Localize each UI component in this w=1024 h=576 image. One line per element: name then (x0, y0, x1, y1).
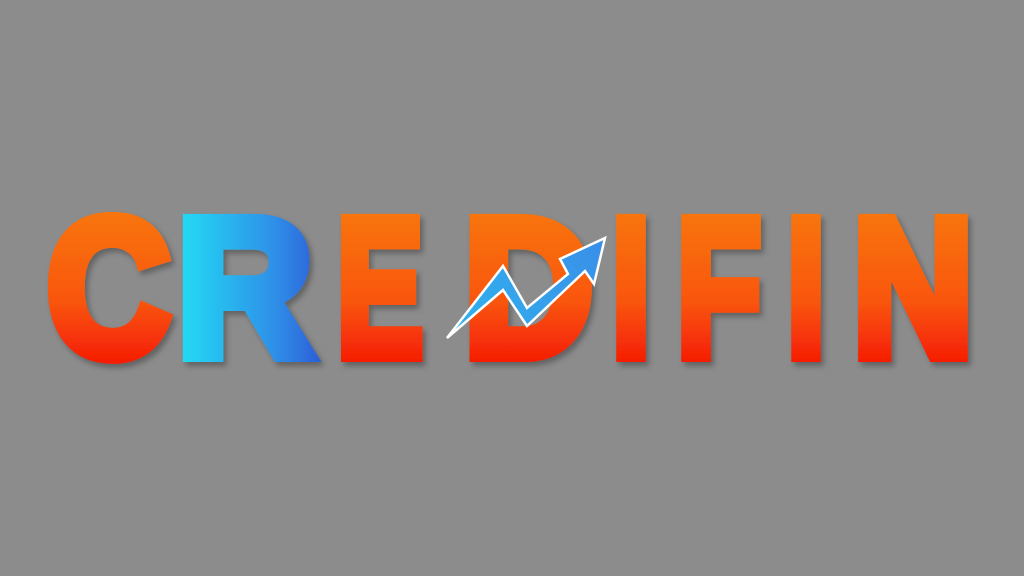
wordmark letters: F (677, 179, 761, 397)
wordmark letters: I (787, 179, 825, 397)
wordmark letters: D (464, 179, 593, 397)
wordmark letters: N (853, 179, 973, 397)
wordmark letters (47, 179, 973, 397)
icon: growth arrow (447, 238, 605, 338)
wordmark letters: R (177, 179, 313, 397)
wordmark letters: E (337, 179, 423, 397)
wordmark letters: C (47, 179, 170, 397)
wordmark letters: I (612, 179, 650, 397)
